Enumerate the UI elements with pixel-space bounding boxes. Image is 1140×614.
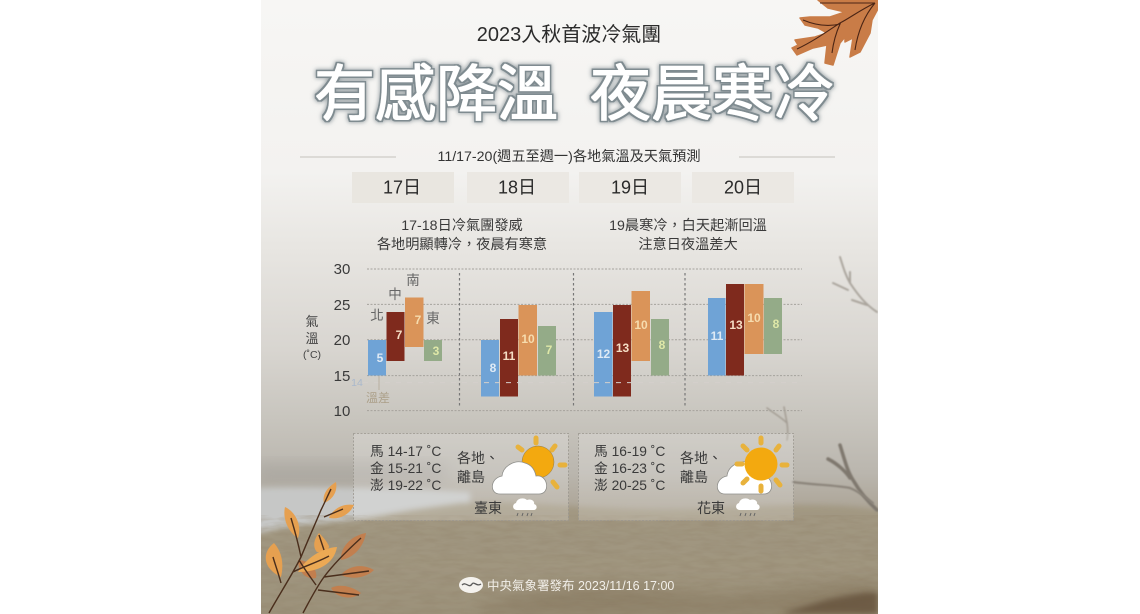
date header boxes: 17日 [383,178,421,198]
icon: small rain cloud [736,498,760,516]
island temperatures: 馬 16-19 ˚C [594,444,665,459]
y axis labels: 20 [334,332,350,349]
region labels: 中 [388,287,402,302]
island temperatures: 澎 20-25 ˚C [594,478,665,493]
area label: 臺東 [474,500,502,516]
day 17 bars: 7 [396,328,403,342]
y axis labels: 15 [334,368,350,385]
area label: 花東 [697,500,725,516]
day 20 bars: 13 [729,318,743,332]
date header boxes: 18日 [498,178,536,198]
note: 19-20 [609,217,767,253]
subtitle: 2023入秋首波冷氣團 [477,23,661,46]
area label: 離島 [680,469,708,485]
note: 19-20: 19晨寒冷，白天起漸回溫 [609,217,767,234]
day 18 bars: 11 [503,349,516,363]
date header boxes: 19日 [611,178,649,198]
section heading with side rules: 11/17-20(週五至週一)各地氣溫及天氣預測 [437,149,701,165]
14 degree reference: 14 [351,377,363,389]
date header boxes: 20日 [724,178,762,198]
temperature difference label: 溫差 [366,391,390,405]
day 20 bars: 8 [773,317,780,331]
date header boxes [352,172,794,203]
island temperatures: 金 15-21 ˚C [370,461,441,476]
day 18 bars [481,305,556,396]
panel: outlying islands 19-20 [578,434,794,520]
island temperatures [594,444,665,493]
area label [457,450,502,516]
background: foggy autumn landscape [250,0,890,614]
island temperatures: 馬 14-17 ˚C [370,444,441,459]
decoration: oak leaf top right [792,0,880,65]
day 19 bars [594,291,669,396]
region labels [370,273,440,326]
main title [314,60,834,128]
day 19 bars: 10 [634,318,648,332]
region labels: 東 [426,311,440,326]
chart: temperature range bars [303,261,802,420]
y axis labels [334,261,350,420]
day 19 bars: 12 [597,347,610,361]
y axis title [303,314,321,361]
day 19 bars: 8 [659,338,666,352]
icon: sun in front of cloud [717,438,787,494]
day 18 bars: 10 [521,332,535,346]
y axis labels: 30 [334,261,350,278]
y axis labels: 10 [334,403,350,420]
day 18 bars: 7 [546,343,553,357]
area label: 各地、 [457,450,499,466]
day 17 bars: 5 [377,351,384,365]
y axis title: 氣 [305,314,319,329]
main title: 夜晨寒冷 [590,60,834,128]
main title: 有感降溫 [314,60,558,128]
note: 17-18: 各地明顯轉冷，夜晨有寒意 [377,236,547,253]
island temperatures: 金 16-23 ˚C [594,461,665,476]
island temperatures: 澎 19-22 ˚C [370,478,441,493]
footer: issuer credit: 中央氣象署發布 2023/11/16 17:00 [487,578,674,593]
region labels: 南 [406,273,420,288]
area label [680,450,725,516]
day 20 bars: 10 [747,311,761,325]
day 18 bars: 8 [490,361,497,375]
decoration: autumn branch bottom left [266,482,374,613]
island temperatures [370,444,441,493]
area label: 各地、 [680,450,722,466]
area label: 離島 [457,469,485,485]
note: 17-18: 17-18日冷氣團發威 [401,218,523,234]
region labels: 北 [370,308,384,323]
day 17 bars [368,298,442,376]
y axis title: (˚C) [303,349,321,361]
icon: small rain cloud [513,498,537,516]
icon: sun behind cloud [492,438,565,494]
y axis labels: 25 [334,297,350,314]
day 20 bars [708,284,782,376]
note: 17-18 [377,218,547,253]
panel: outlying islands 17-18 [354,434,568,520]
day 20 bars: 11 [711,329,724,343]
y axis title: 溫 [305,331,319,346]
day 19 bars: 13 [616,341,629,355]
temperature difference label [366,376,390,405]
decoration: bare tree branches right [767,257,877,510]
day 17 bars: 3 [433,344,440,358]
note: 19-20: 注意日夜溫差大 [638,236,738,253]
day 17 bars: 7 [415,313,422,327]
